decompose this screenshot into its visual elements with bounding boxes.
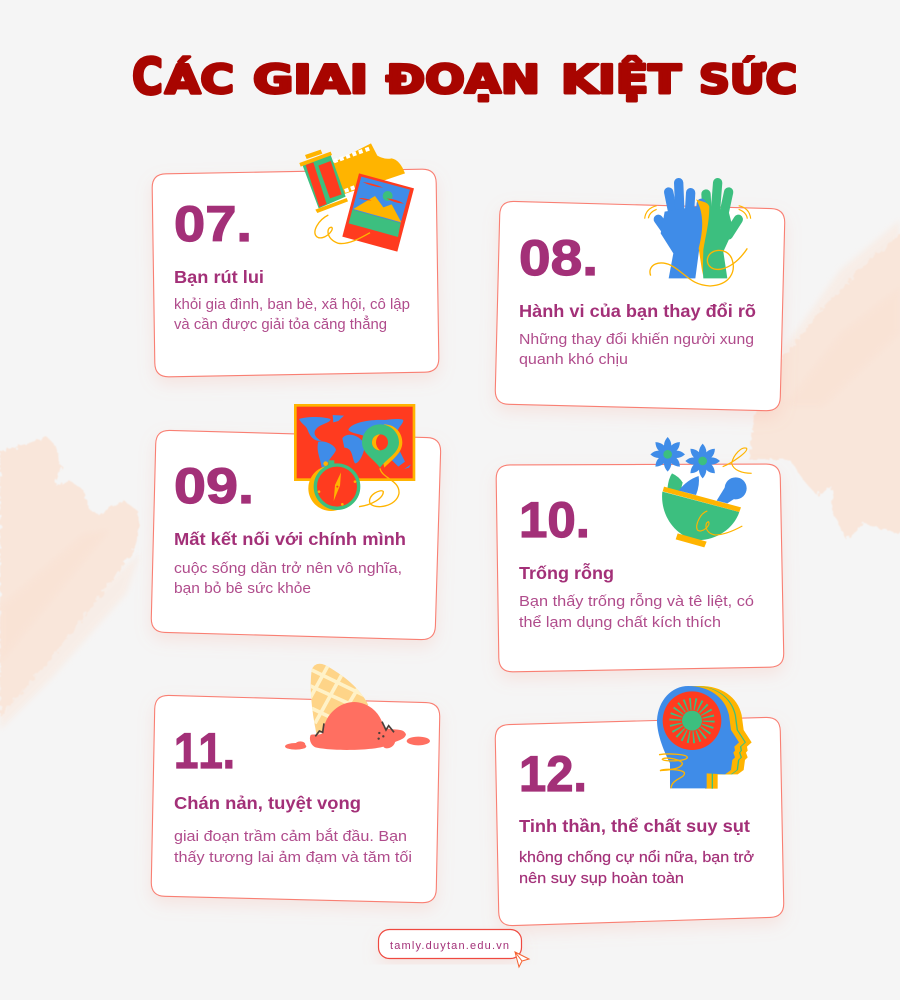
- body 09: [174, 560, 402, 597]
- body 07: [174, 296, 410, 333]
- body 07: và cần được giải tỏa căng thẳng: [174, 315, 387, 333]
- heading 11: Chán nản, tuyệt vọng: [174, 793, 361, 813]
- panel: stage 11: [151, 664, 440, 903]
- heading 12: Tinh thần, thể chất suy sụt: [519, 816, 750, 836]
- body 11: [174, 828, 412, 866]
- panel: stage 09: [151, 405, 441, 640]
- card 10 background: [496, 464, 784, 672]
- body 07: khỏi gia đình, bạn bè, xã hội, cô lập: [174, 296, 410, 313]
- card 07 background: [152, 169, 439, 377]
- title: C: [132, 48, 163, 106]
- title: SỨC: [699, 56, 797, 103]
- body 12: [519, 849, 754, 887]
- heading 07: Bạn rút lui: [174, 267, 264, 287]
- card 11 background: [151, 695, 440, 903]
- website text: tamly.duytan.edu.vn: [390, 940, 509, 952]
- card 12 background: [495, 717, 784, 926]
- number 08: 08.: [519, 230, 598, 286]
- panel: stage 10: [496, 437, 784, 672]
- heading 08: Hành vi của bạn thay đổi rõ: [519, 301, 756, 321]
- panel: stage 07: [152, 143, 439, 377]
- brush splash: right: [749, 220, 900, 540]
- panel: stage 08: [495, 183, 785, 411]
- card 08 background: [495, 201, 785, 411]
- icon: raised hands: [645, 183, 751, 286]
- icon: film roll and photo: [299, 143, 414, 252]
- panel: stage 12: [495, 686, 784, 926]
- number 12: 12.: [519, 746, 587, 802]
- title: KIỆT: [561, 56, 681, 103]
- body 08: Những thay đổi khiến người xung: [519, 331, 754, 348]
- title: [132, 48, 797, 106]
- heading 10: Trống rỗng: [519, 562, 614, 583]
- title: ĐOẠN: [386, 58, 540, 103]
- icon: world map, pin and compass: [295, 405, 414, 511]
- pill outline: [378, 930, 522, 958]
- body 11: thấy tương lai ảm đạm và tăm tối: [174, 849, 412, 866]
- body 11: giai đoạn trầm cảm bắt đầu. Bạn: [174, 828, 407, 845]
- icon: head profile with sun: [657, 686, 752, 789]
- body 12: không chống cự nổi nữa, bạn trở: [519, 849, 754, 866]
- body 08: [519, 331, 754, 368]
- heading 09: Mất kết nối với chính mình: [174, 529, 406, 549]
- body 08: quanh khó chịu: [519, 351, 628, 368]
- body 09: cuộc sống dần trở nên vô nghĩa,: [174, 560, 402, 577]
- brush splash: left: [0, 437, 140, 730]
- icon: dropped ice cream: [285, 664, 430, 750]
- number 10: 10.: [519, 492, 590, 548]
- body 12: nên suy sụp hoàn toàn: [519, 870, 684, 887]
- number 11: 11.: [174, 723, 235, 779]
- icon: mortar, pestle and flowers: [650, 437, 752, 547]
- body 09: bạn bỏ bê sức khỏe: [174, 580, 311, 597]
- website pill: [378, 930, 529, 967]
- body 10: [519, 593, 754, 631]
- title: GIAI: [253, 58, 368, 103]
- number 09: 09.: [174, 458, 254, 514]
- card 09 background: [151, 430, 441, 640]
- body 10: Bạn thấy trống rỗng và tê liệt, có: [519, 593, 754, 610]
- icon: cursor arrow: [515, 952, 529, 967]
- body 10: thể lạm dụng chất kích thích: [519, 614, 721, 631]
- title: ÁC: [165, 56, 234, 103]
- number 07: 07.: [174, 196, 252, 252]
